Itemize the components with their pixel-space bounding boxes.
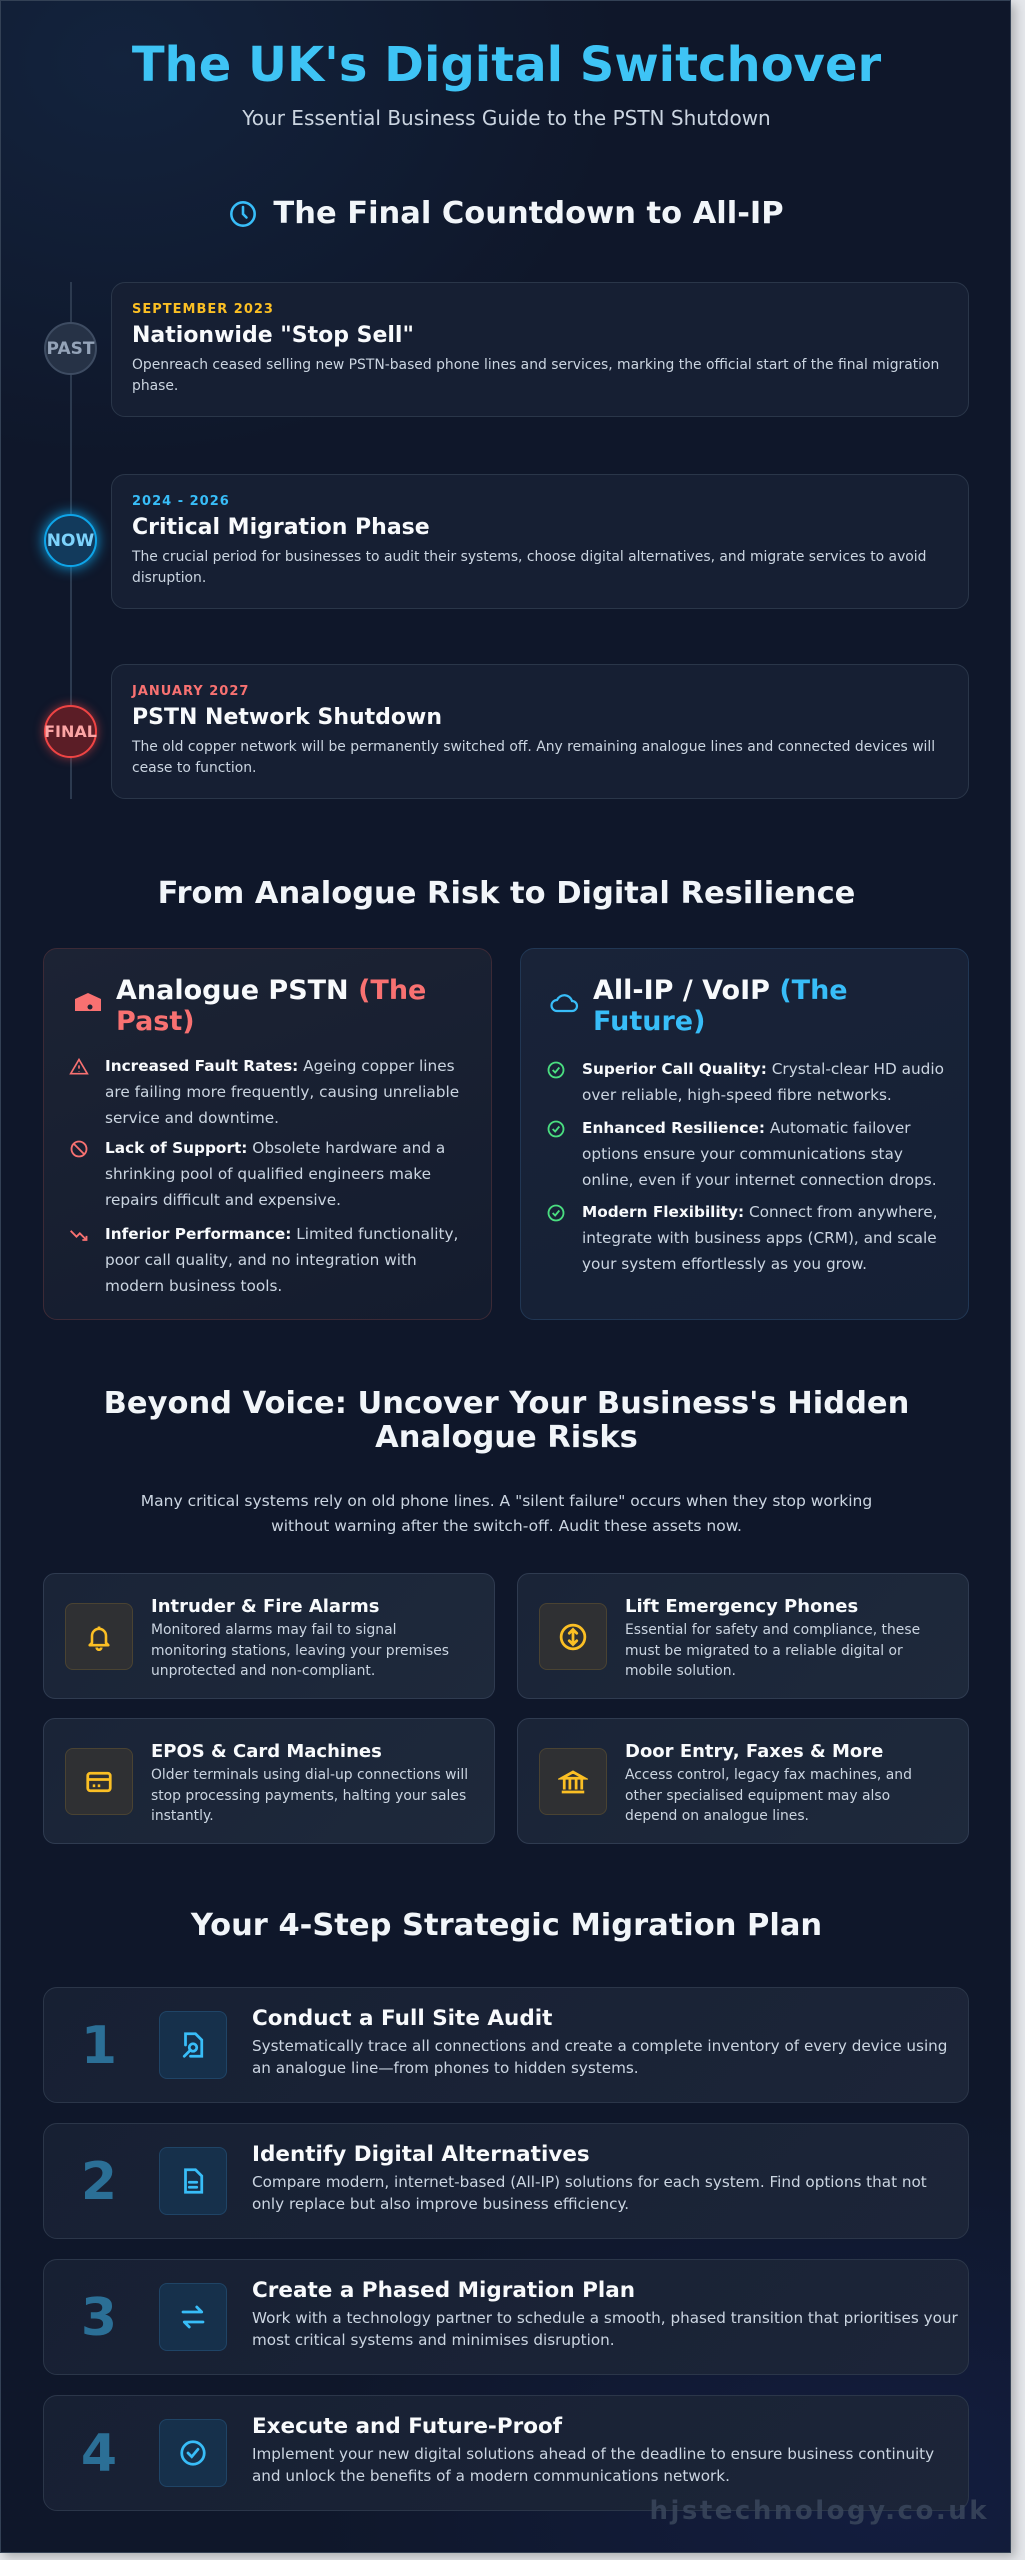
panel: analogue: Analogue PSTN (The Past) <box>116 975 426 1037</box>
item: support: Lack of Support: Obsolete hardware and a shrinking pool of qualified engineers make repairs difficult and expensive. <box>105 1139 445 1209</box>
item: performance: Inferior Performance: Limited functionality, poor call quality, and no integration with modern business tools. <box>105 1225 458 1295</box>
icon: cloud <box>550 994 578 1012</box>
risk: alarms <box>43 1573 495 1699</box>
step 2: 2 <box>81 2152 117 2212</box>
step 3 <box>43 2259 969 2375</box>
step 2 <box>43 2123 969 2239</box>
risk: door entry: Door Entry, Faxes & More <box>625 1741 883 1762</box>
marker: past: PAST <box>47 338 94 358</box>
title: The UK's Digital Switchover <box>132 37 881 93</box>
card: migration: 2024 - 2026 <box>132 494 230 509</box>
card: migration: The crucial period for businesses to audit their systems, choose digital alternatives, and migrate services to avoid disruption. <box>132 549 926 586</box>
item: call quality: Superior Call Quality: Crystal-clear HD audio over reliable, high-speed fibre networks. <box>582 1060 944 1104</box>
step 1: 1 <box>81 2016 117 2076</box>
risk: lifts <box>517 1573 969 1699</box>
card: stop sell <box>111 282 969 417</box>
item: resilience: Enhanced Resilience: Automatic failover options ensure your communications stay online, even if your internet connection drops. <box>582 1119 937 1189</box>
heading: comparison: From Analogue Risk to Digital Resilience <box>158 876 855 911</box>
panel: all-ip <box>520 948 969 1320</box>
timeline <box>34 282 969 799</box>
icon: bell <box>65 1603 133 1670</box>
icon: broken house <box>75 993 101 1011</box>
heading: migration plan: Your 4-Step Strategic Migration Plan <box>191 1908 822 1943</box>
card: stop sell: SEPTEMBER 2023 <box>132 302 274 317</box>
icon: arrows <box>159 2283 227 2351</box>
intro text: Many critical systems rely on old phone lines. A "silent failure" occurs when they stop working without warning after the switch-off. Audit these assets now. <box>141 1492 872 1535</box>
step 3: Create a Phased Migration Plan <box>252 2278 635 2303</box>
panel: analogue <box>43 948 492 1320</box>
marker: now: NOW <box>47 530 94 550</box>
risk: epos <box>43 1718 495 1844</box>
icon: file search <box>159 2011 227 2079</box>
icon: clock <box>230 201 256 227</box>
risk: epos: EPOS & Card Machines <box>151 1741 382 1762</box>
subtitle: Your Essential Business Guide to the PSTN Shutdown <box>242 106 771 130</box>
step 3: Work with a technology partner to schedule a smooth, phased transition that prioritises your most critical systems and minimises disruption. <box>252 2309 958 2349</box>
heading: countdown: The Final Countdown to All-IP <box>273 196 784 231</box>
heading: hidden risks <box>104 1386 909 1455</box>
marker: final: FINAL <box>44 722 97 741</box>
item: flexibility: Modern Flexibility: Connect from anywhere, integrate with business apps (CRM), and scale your system effortlessly as you grow. <box>582 1203 937 1273</box>
marker: final <box>44 705 97 758</box>
marker: now <box>44 514 97 567</box>
risk: lifts: Essential for safety and compliance, these must be migrated to a reliable digital or mobile solution. <box>625 1622 920 1679</box>
risk: alarms: Intruder & Fire Alarms <box>151 1596 379 1617</box>
step 1: Systematically trace all connections and create a complete inventory of every device using an analogue line—from phones to hidden systems. <box>252 2037 947 2077</box>
icon: card <box>65 1748 133 1815</box>
step 4 <box>43 2395 969 2511</box>
card: stop sell: Openreach ceased selling new PSTN-based phone lines and services, marking the official start of the final migration phase. <box>132 357 939 394</box>
heading: hidden risks: Analogue Risks <box>375 1420 638 1455</box>
icon: document <box>159 2147 227 2215</box>
risk: door entry <box>517 1718 969 1844</box>
risk: lifts: Lift Emergency Phones <box>625 1596 858 1617</box>
step 1 <box>43 1987 969 2103</box>
step 3: 3 <box>81 2288 117 2348</box>
icon: lift <box>539 1603 607 1670</box>
card: shutdown: PSTN Network Shutdown <box>132 705 442 730</box>
card: migration: Critical Migration Phase <box>132 515 430 540</box>
step 4: Implement your new digital solutions ahead of the deadline to ensure business continuity and unlock the benefits of a modern communications network. <box>252 2445 934 2485</box>
panel: all-ip: All-IP / VoIP (The Future) <box>593 975 848 1037</box>
card: stop sell: Nationwide "Stop Sell" <box>132 323 414 348</box>
watermark: hjstechnology.co.uk <box>649 2496 989 2526</box>
card: shutdown: The old copper network will be permanently switched off. Any remaining analogue lines and connected devices will cease to function. <box>132 739 935 776</box>
risk: alarms: Monitored alarms may fail to signal monitoring stations, leaving your premises unprotected and non-compliant. <box>151 1622 449 1679</box>
card: shutdown <box>111 664 969 799</box>
item: fault rates: Increased Fault Rates: Ageing copper lines are failing more frequently, causing unreliable service and downtime. <box>105 1057 459 1127</box>
icon: building <box>539 1748 607 1815</box>
risk: door entry: Access control, legacy fax machines, and other specialised equipment may also depend on analogue lines. <box>625 1767 912 1824</box>
step 2: Compare modern, internet-based (All-IP) solutions for each system. Find options that not only replace but also improve business efficiency. <box>252 2173 927 2213</box>
step 4: 4 <box>81 2424 117 2484</box>
card: migration <box>111 474 969 609</box>
step 2: Identify Digital Alternatives <box>252 2142 590 2167</box>
card: shutdown: JANUARY 2027 <box>132 684 249 699</box>
icon: check circle <box>159 2419 227 2487</box>
step 4: Execute and Future-Proof <box>252 2414 562 2439</box>
heading: hidden risks: Beyond Voice: Uncover Your Business's Hidden <box>104 1386 909 1421</box>
risk: epos: Older terminals using dial-up connections will stop processing payments, halting your sales instantly. <box>151 1767 468 1824</box>
step 1: Conduct a Full Site Audit <box>252 2006 552 2031</box>
marker: past <box>44 322 97 375</box>
